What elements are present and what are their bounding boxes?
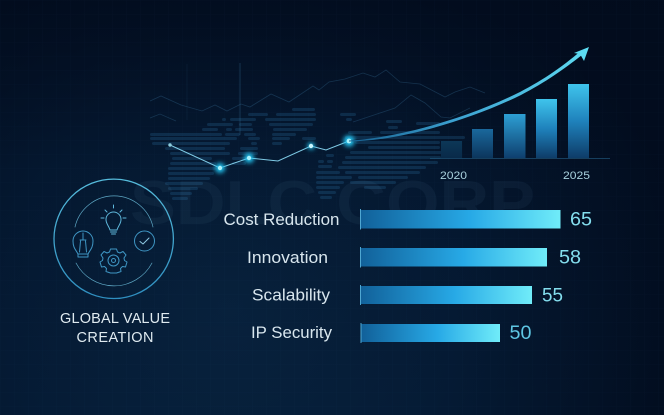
row: IP security: 50 [510,322,532,344]
year labels: 2025 [563,170,590,182]
icon: check mark badge [134,231,154,251]
emblem caption: CREATION [76,330,154,346]
row: cost reduction: Cost Reduction [224,210,340,229]
line chart with glowing points [168,136,354,173]
emblem caption [60,311,170,346]
row: cost reduction: 65 [570,208,592,230]
icon: outlined bulb with tower [73,231,93,257]
horizontal bar rows [224,208,592,344]
row: scalability: 55 [542,284,563,306]
icon: light bulb [101,205,126,234]
outer ring [54,179,173,298]
row: scalability: Scalability [252,286,330,304]
emblem: global value creation [54,179,173,298]
background faint market lines [150,63,485,135]
world map made of dashes [150,108,465,200]
growth arrow [349,47,589,142]
year labels [440,170,590,182]
year labels: 2020 [440,170,467,182]
row: cost reduction [224,208,592,230]
row: IP security [251,322,532,344]
row: innovation [247,246,581,268]
watermark: SDLC CORP: SDLC CORP [130,169,535,238]
row: innovation: 58 [559,246,581,268]
inner arcs [75,196,153,286]
icon: gear [100,249,127,273]
bar chart: 2020 to 2025 [430,84,610,159]
row: scalability [252,284,563,306]
emblem caption: GLOBAL VALUE [60,311,170,327]
row: IP security: IP Security [251,323,332,342]
row: innovation: Innovation [247,248,328,267]
